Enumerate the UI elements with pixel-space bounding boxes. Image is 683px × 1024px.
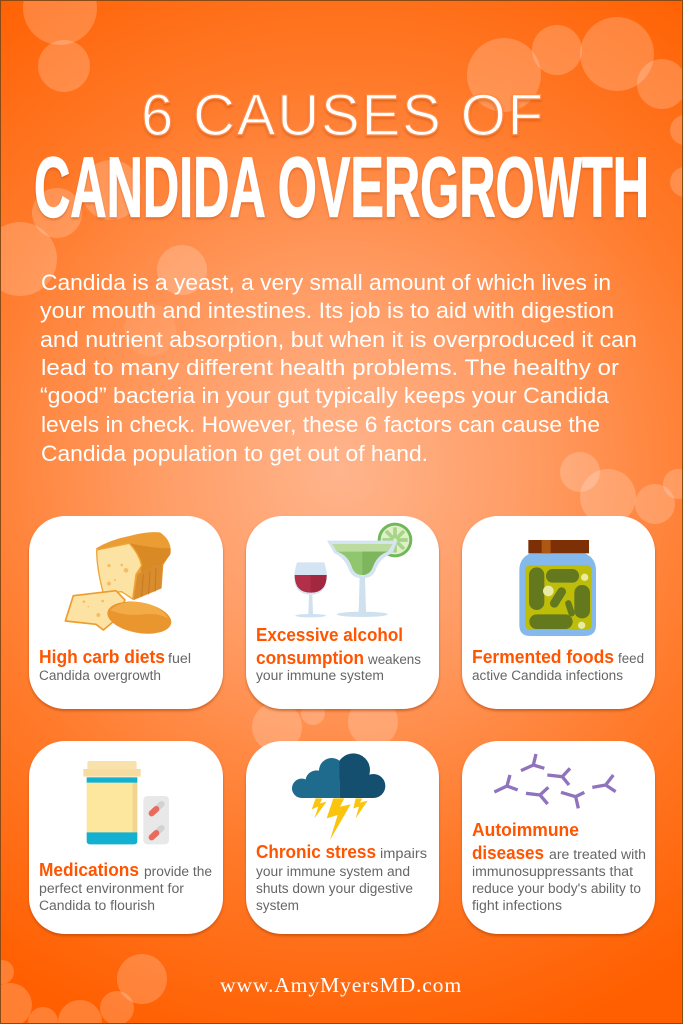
heading: Autoimmune — [472, 820, 579, 840]
footer website: www.AmyMyersMD.com — [220, 973, 462, 997]
panel: autoimmune diseases — [462, 741, 655, 934]
icon: wine and margarita — [294, 523, 412, 617]
description — [39, 864, 212, 913]
description — [256, 652, 421, 683]
heading — [256, 625, 403, 668]
intro paragraph: Candida population to get out of hand. — [41, 441, 428, 466]
description: perfect environment for — [39, 881, 185, 896]
intro paragraph: “good” bacteria in your gut typically keeps your Candida — [40, 383, 610, 408]
heading: Medications — [39, 860, 139, 880]
description: system — [256, 898, 299, 913]
icon: storm cloud — [292, 753, 385, 840]
heading: diseases — [472, 843, 544, 863]
description — [472, 651, 644, 683]
description — [256, 846, 427, 913]
description: your immune system — [256, 668, 384, 683]
heading: consumption — [256, 648, 364, 668]
description — [39, 651, 191, 683]
icon: pill bottle and blister pack — [83, 761, 169, 844]
intro paragraph: Candida is a yeast, a very small amount of which lives in — [41, 270, 611, 295]
description: shuts down your digestive — [256, 881, 413, 896]
title line 1: 6 CAUSES OF — [141, 83, 543, 148]
icon: bread — [65, 532, 174, 638]
description: active Candida infections — [472, 668, 623, 683]
description: provide the — [144, 864, 212, 879]
heading — [472, 820, 579, 863]
panel: excessive alcohol consumption — [246, 516, 439, 709]
description — [472, 847, 646, 913]
intro paragraph: your mouth and intestines. Its job is to aid with digestion — [40, 298, 614, 323]
description: fuel — [168, 651, 191, 666]
icon: antibodies — [494, 754, 616, 808]
description: weakens — [367, 652, 421, 667]
description: feed — [618, 651, 644, 666]
intro paragraph — [40, 270, 637, 466]
description: reduce your body's ability to — [472, 881, 641, 896]
heading: High carb diets — [39, 647, 165, 667]
description: immunosuppressants that — [472, 864, 633, 879]
description: are treated with — [549, 847, 646, 862]
panel: fermented foods — [462, 516, 655, 709]
panel: high carb diets — [29, 516, 223, 709]
description: impairs — [380, 846, 427, 861]
heading: Fermented foods — [472, 647, 614, 667]
panel: chronic stress — [246, 741, 439, 934]
icon: pickle jar — [519, 540, 596, 636]
description: Candida overgrowth — [39, 668, 161, 683]
intro paragraph: levels in check. However, these 6 factors can cause the — [41, 412, 600, 437]
description: your immune system and — [256, 864, 410, 879]
panel: medications — [29, 741, 223, 934]
heading: Chronic stress — [256, 842, 376, 862]
intro paragraph: and nutrient absorption, but when it is overproduced it can — [40, 327, 637, 352]
intro paragraph: lead to many different health problems. The healthy or — [41, 355, 619, 380]
description: Candida to flourish — [39, 898, 155, 913]
heading: Excessive alcohol — [256, 625, 403, 645]
description: fight infections — [472, 898, 562, 913]
